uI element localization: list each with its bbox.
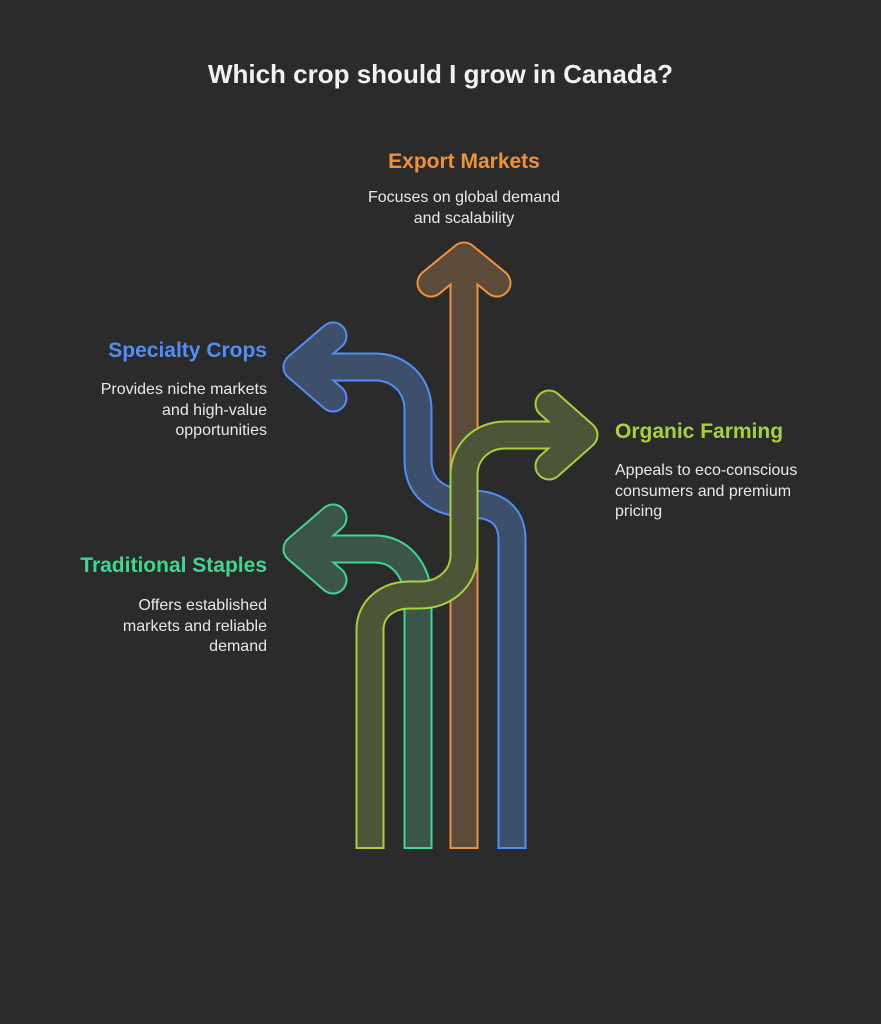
heading: specialty crops: Specialty Crops bbox=[108, 339, 267, 362]
text: export markets: Focuses on global demand bbox=[368, 189, 560, 206]
text: traditional staples: Offers established bbox=[138, 597, 267, 614]
text: traditional staples bbox=[123, 597, 267, 655]
text: specialty crops: and high-value bbox=[162, 402, 267, 418]
text: export markets bbox=[368, 189, 560, 226]
text: traditional staples: markets and reliable bbox=[123, 618, 267, 634]
text: organic farming: Appeals to eco-conscious bbox=[615, 462, 797, 479]
text: organic farming bbox=[615, 462, 797, 520]
arrow: specialty crops (blue) bbox=[297, 336, 512, 849]
text: specialty crops: Provides niche markets bbox=[101, 381, 267, 398]
text: organic farming: pricing bbox=[615, 503, 662, 520]
heading: organic farming: Organic Farming bbox=[615, 420, 783, 443]
arrow: organic farming (lime) bbox=[370, 404, 584, 849]
text: organic farming: consumers and premium bbox=[615, 482, 791, 500]
arrow: export markets (orange) bbox=[431, 256, 497, 849]
heading: traditional staples: Traditional Staples bbox=[80, 554, 267, 577]
text: specialty crops: opportunities bbox=[175, 422, 267, 439]
heading: export markets: Export Markets bbox=[388, 150, 540, 173]
title: Which crop should I grow in Canada? bbox=[208, 59, 673, 89]
arrow: traditional staples (green) bbox=[297, 518, 418, 849]
text: traditional staples: demand bbox=[209, 638, 267, 655]
text: specialty crops bbox=[101, 381, 267, 439]
text: export markets: and scalability bbox=[414, 210, 514, 226]
